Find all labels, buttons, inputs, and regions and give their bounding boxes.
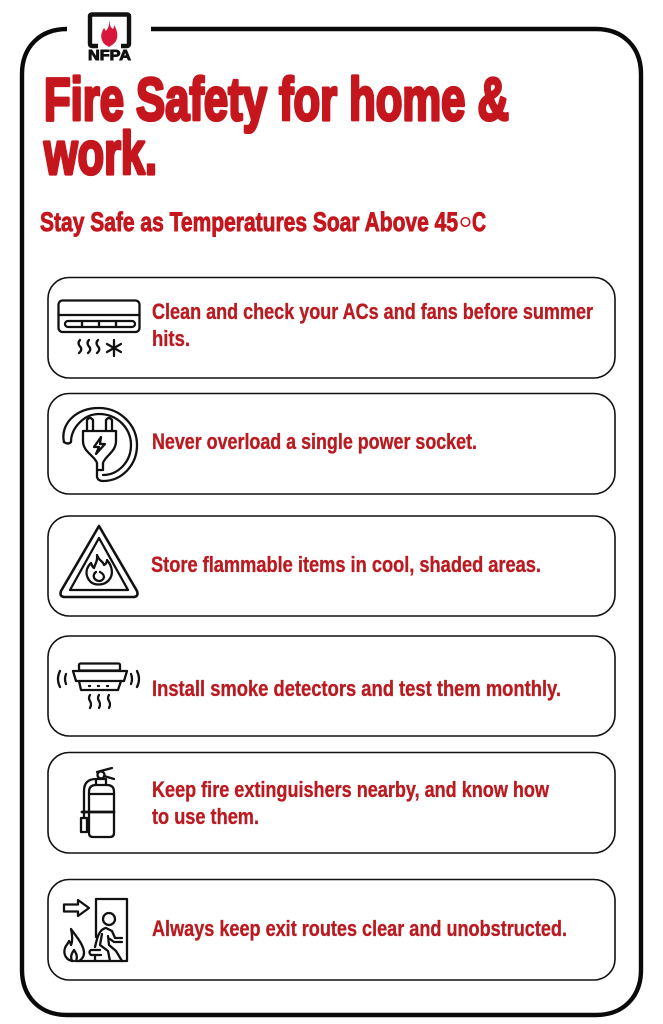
- subtitle: [40, 197, 486, 244]
- text: flammable items: Store flammable items in cool, shaded areas.: [151, 552, 541, 577]
- icon: air conditioner: [58, 300, 140, 356]
- text: power socket: Never overload a single power socket.: [152, 429, 477, 454]
- panel: fire extinguishers: to use them.: [152, 804, 259, 829]
- icon: plug: [63, 408, 137, 481]
- panel: clean ACs and fans: hits.: [152, 326, 190, 351]
- icon: NFPA logo: [88, 14, 132, 64]
- icon: fire extinguisher: [81, 768, 114, 837]
- panel: power socket: [48, 394, 615, 494]
- icon: emergency exit: [64, 899, 127, 961]
- icon: flammable warning: [60, 526, 138, 597]
- subtitle: C: [472, 207, 486, 237]
- panel: flammable items: [48, 516, 615, 616]
- subtitle: Stay Safe as Temperatures Soar Above 45: [40, 207, 458, 237]
- icon: smoke detector: [58, 664, 139, 708]
- text: fire extinguishers: Keep fire extinguishers nearby, and know how: [152, 777, 550, 802]
- panel: fire extinguishers: [48, 752, 615, 853]
- title: [43, 66, 509, 187]
- text: exit routes: Always keep exit routes clear and unobstructed.: [152, 916, 567, 941]
- panel: clean ACs and fans: [48, 278, 615, 378]
- panel: exit routes: [48, 880, 615, 980]
- text: smoke detectors: Install smoke detectors and test them monthly.: [152, 676, 561, 701]
- title: work.: [43, 120, 157, 187]
- icon: NFPA logo: NFPA: [88, 48, 132, 64]
- panel: smoke detectors: [48, 636, 615, 736]
- subtitle: ◦: [458, 197, 473, 244]
